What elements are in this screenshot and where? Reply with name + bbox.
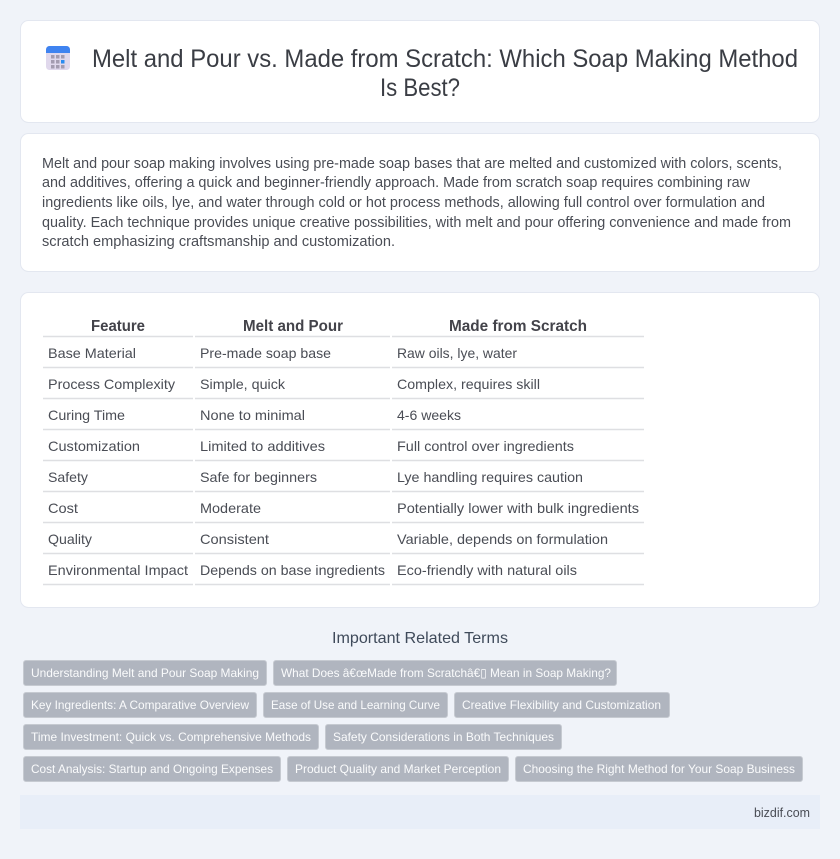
row: process complexity: Simple, quick — [200, 376, 286, 392]
tag — [274, 660, 616, 686]
tag: Time Investment: Quick vs. Comprehensive Methods — [31, 730, 311, 744]
row: environmental impact: Environmental Impact — [48, 562, 188, 578]
row: safety: Safe for beginners — [200, 469, 317, 485]
panel: description — [20, 134, 820, 272]
title: Melt and Pour vs. Made from Scratch: Which Soap Making Method — [92, 45, 798, 73]
row: safety: Safety — [48, 469, 88, 485]
row: customization: Full control over ingredients — [397, 438, 574, 454]
footer: bizdif.com — [754, 806, 810, 820]
row: environmental impact — [48, 562, 577, 578]
row: quality — [48, 531, 608, 547]
tag — [516, 756, 802, 782]
tag — [326, 724, 562, 750]
tag: Product Quality and Market Perception — [295, 762, 501, 776]
icon: calendar — [46, 46, 70, 70]
row: customization: Customization — [48, 438, 140, 454]
text block: description: ingredients like oils, lye, and water through cold or hot process methods, allowing full control over formulation and — [42, 195, 765, 211]
tag: Cost Analysis: Startup and Ongoing Expenses — [31, 762, 273, 776]
row: cost — [48, 500, 639, 516]
tag: Understanding Melt and Pour Soap Making — [31, 666, 259, 680]
row: curing time — [48, 407, 461, 423]
panel: comparison table — [20, 292, 820, 608]
row: base material — [48, 345, 517, 361]
row: quality: Consistent — [200, 531, 269, 547]
row: process complexity: Complex, requires skill — [397, 376, 540, 392]
title: Is Best? — [380, 74, 460, 102]
row: environmental impact: Depends on base ingredients — [200, 562, 385, 578]
row: base material: Pre-made soap base — [200, 345, 331, 361]
text block: description: and additives, offering a quick and beginner-friendly approach. Made from scratch soap requires combining raw — [42, 175, 751, 191]
panel: title card — [20, 20, 820, 122]
tag: Choosing the Right Method for Your Soap Business — [523, 762, 795, 776]
tag: Creative Flexibility and Customization — [462, 698, 661, 712]
tag: What Does â€œMade from Scratchâ€▯ Mean in Soap Making? — [281, 666, 611, 680]
row: process complexity: Process Complexity — [48, 376, 175, 392]
row: safety — [48, 469, 583, 485]
table header: Feature — [91, 318, 145, 335]
tag: Ease of Use and Learning Curve — [271, 698, 440, 712]
row: environmental impact: Eco-friendly with natural oils — [397, 562, 577, 578]
row: quality: Variable, depends on formulation — [397, 531, 608, 547]
tag — [24, 724, 318, 750]
table header: Made from Scratch — [449, 318, 587, 335]
row: curing time: None to minimal — [200, 407, 305, 423]
row: cost: Moderate — [200, 500, 261, 516]
text block: description — [42, 156, 791, 250]
title — [92, 45, 798, 102]
table header — [91, 318, 587, 335]
table header: Melt and Pour — [243, 318, 343, 335]
tag — [454, 692, 670, 718]
row: base material: Raw oils, lye, water — [397, 345, 517, 361]
row: base material: Base Material — [48, 345, 136, 361]
text block: description: Melt and pour soap making involves using pre-made soap bases that are melted and customized with colors, scents, — [42, 156, 782, 172]
tag — [24, 756, 280, 782]
row: customization — [48, 438, 574, 454]
row: cost: Cost — [48, 500, 78, 516]
tags: related terms — [24, 660, 802, 782]
tag: Key Ingredients: A Comparative Overview — [31, 698, 249, 712]
row: quality: Quality — [48, 531, 92, 547]
text block: description: scratch emphasizing craftsmanship and customization. — [42, 234, 395, 250]
footer — [20, 795, 820, 829]
row: curing time: 4-6 weeks — [397, 407, 461, 423]
row: cost: Potentially lower with bulk ingredients — [397, 500, 639, 516]
row: customization: Limited to additives — [200, 438, 325, 454]
row: safety: Lye handling requires caution — [397, 469, 583, 485]
text block: description: quality. Each technique provides unique creative possibilities, with melt and pour offering convenience and made from — [42, 215, 791, 231]
tag — [288, 756, 508, 782]
heading: important related terms: Important Related Terms — [332, 630, 508, 647]
tag: Safety Considerations in Both Techniques — [333, 730, 554, 744]
tag — [24, 692, 256, 718]
tag — [24, 660, 266, 686]
row: curing time: Curing Time — [48, 407, 125, 423]
row: process complexity — [48, 376, 540, 392]
tag — [264, 692, 448, 718]
